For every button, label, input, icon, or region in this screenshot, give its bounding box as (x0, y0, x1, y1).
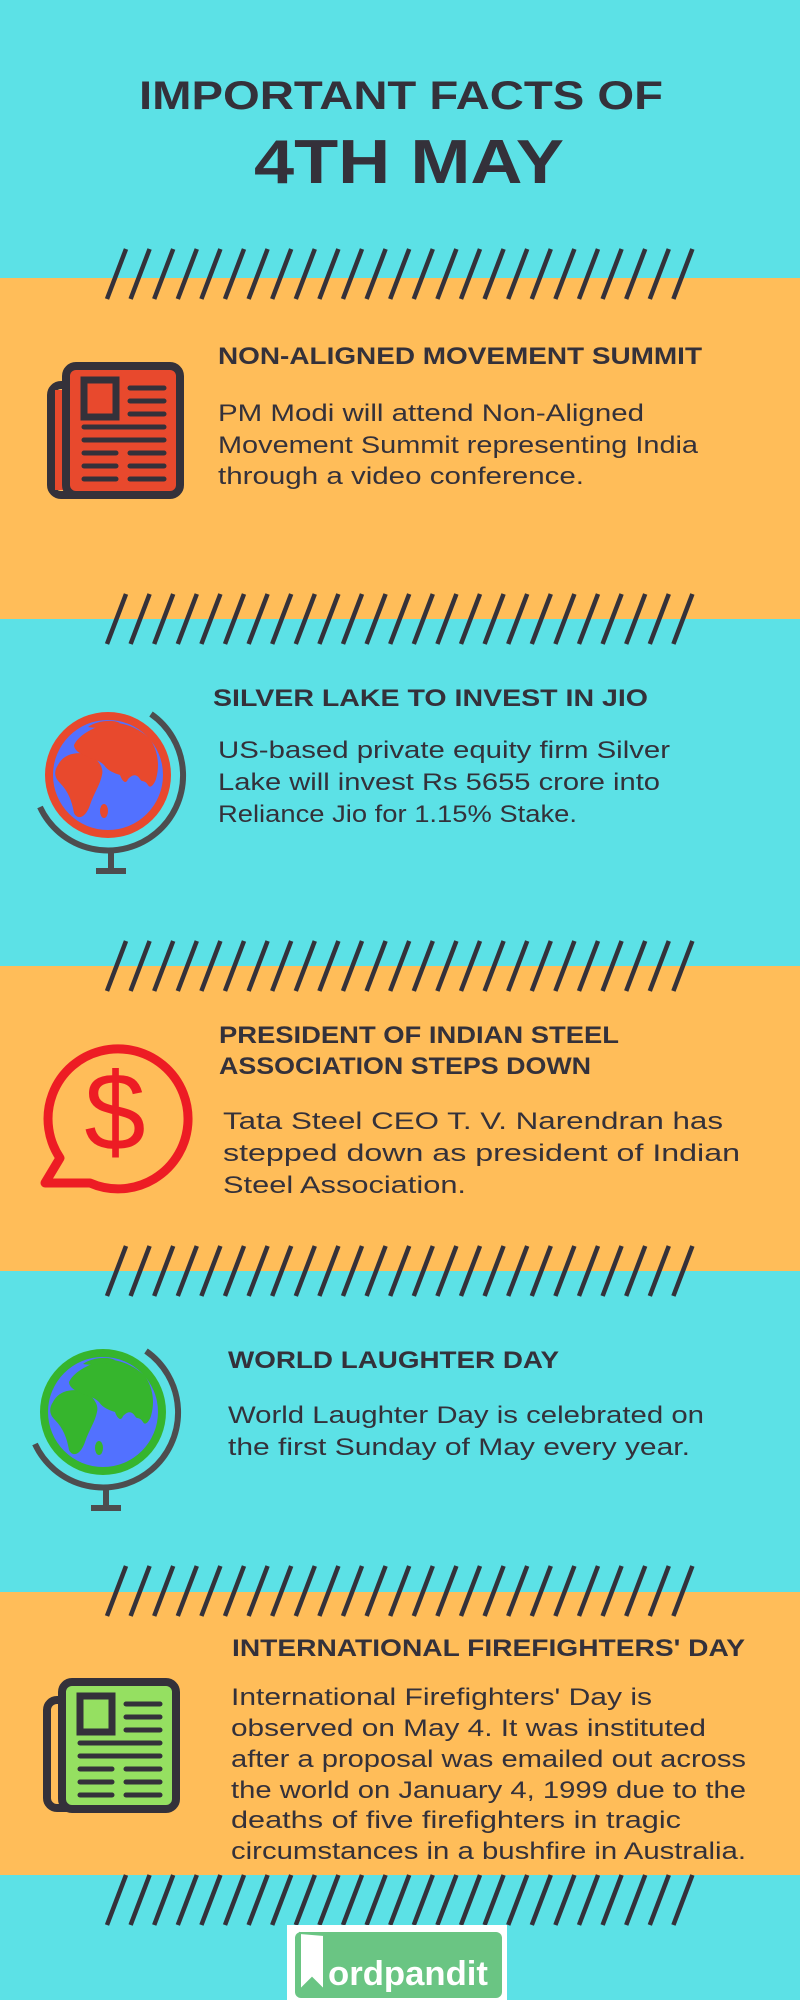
text block (228, 1402, 704, 1461)
panel: silver lake (40, 685, 670, 874)
title: 4TH MAY (254, 128, 564, 197)
text block: circumstances in a bushfire in Australia. (231, 1838, 746, 1865)
heading: WORLD LAUGHTER DAY (228, 1347, 559, 1374)
icon: red newspaper (51, 366, 180, 495)
text block: World Laughter Day is celebrated on (228, 1402, 704, 1429)
icon: dollar speech bubble (45, 1049, 188, 1189)
text block (231, 1684, 746, 1865)
text block: US-based private equity firm Silver (218, 737, 670, 764)
text block: through a video conference. (218, 463, 584, 490)
icon: red globe (40, 712, 183, 874)
text block: PM Modi will attend Non-Aligned (218, 400, 644, 427)
panel: non-aligned movement summit (51, 343, 702, 495)
heading: NON-ALIGNED MOVEMENT SUMMIT (218, 343, 702, 370)
text block: International Firefighters' Day is (231, 1684, 652, 1711)
text block: Lake will invest Rs 5655 crore into (218, 769, 660, 796)
logo: wordpandit: ordpandit (328, 1955, 488, 1993)
title: IMPORTANT FACTS OF (139, 74, 663, 118)
text block (218, 400, 699, 490)
text block: the first Sunday of May every year. (228, 1434, 690, 1461)
icon: green newspaper (47, 1682, 176, 1809)
heading (219, 1022, 619, 1080)
panel: international firefighters day (47, 1635, 746, 1865)
text block (218, 737, 670, 828)
text block (223, 1108, 740, 1199)
text block: after a proposal was emailed out across (231, 1746, 746, 1773)
text block: Movement Summit representing India (218, 432, 699, 459)
logo: wordpandit (287, 1925, 507, 2000)
heading: PRESIDENT OF INDIAN STEEL (219, 1022, 619, 1049)
background bands (0, 278, 800, 1875)
text block: Steel Association. (223, 1172, 466, 1199)
heading: SILVER LAKE TO INVEST IN JIO (213, 685, 648, 712)
text block: deaths of five firefighters in tragic (231, 1807, 681, 1834)
text block: observed on May 4. It was instituted (231, 1715, 706, 1742)
panel: indian steel association (45, 1022, 740, 1199)
heading: ASSOCIATION STEPS DOWN (219, 1053, 591, 1080)
text block: Tata Steel CEO T. V. Narendran has (223, 1108, 723, 1135)
text block: the world on January 4, 1999 due to the (231, 1777, 746, 1804)
title (139, 74, 663, 197)
panel: world laughter day (35, 1347, 704, 1511)
heading: INTERNATIONAL FIREFIGHTERS' DAY (232, 1635, 745, 1662)
text block: Reliance Jio for 1.15% Stake. (218, 801, 577, 828)
icon: dollar speech bubble: $ (84, 1051, 146, 1174)
text block: stepped down as president of Indian (223, 1140, 740, 1167)
icon: green globe (35, 1349, 178, 1511)
